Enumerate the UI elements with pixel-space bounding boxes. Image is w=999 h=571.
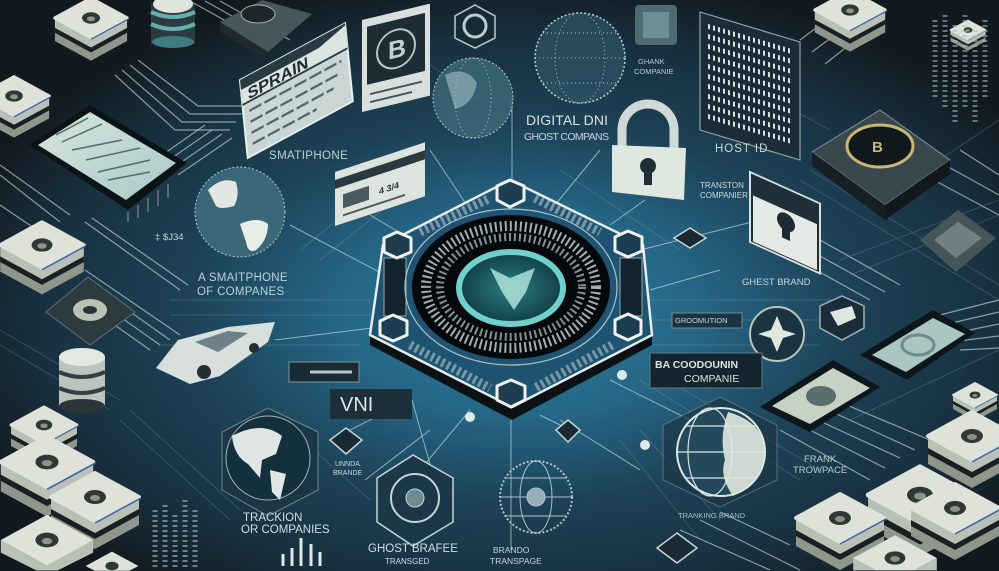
panel: credit card: 4 3/4 [379, 180, 400, 196]
main hexagon emblem [370, 180, 652, 420]
icon: dotted globe, top centre [535, 13, 625, 103]
icon: earth hexagon, lower left [222, 408, 318, 516]
icon: chip, top right [812, 110, 950, 220]
icon: database cylinder [59, 348, 105, 413]
label: vni [330, 389, 412, 419]
text: a smartphone of companies: OF COMPANES [197, 286, 284, 298]
icon: grey chip, right [920, 210, 996, 272]
icon: padlock [612, 104, 686, 200]
frame panels [384, 198, 642, 388]
label: bank companies: BA COODOUNIN [655, 359, 738, 371]
icon: top hexagon [455, 5, 495, 48]
decoration: binary column right [935, 15, 985, 125]
text: tracking of companies: OR COMPANIES [241, 524, 330, 536]
icon: emblem hexagon [820, 296, 864, 340]
panel: credit card [335, 142, 425, 226]
label: frank tropace: FRANK [804, 454, 837, 465]
heading: ghost companies small: GHANK [638, 57, 665, 66]
icons: blocks lower left [1, 407, 141, 571]
panel: bitcoin card: B [388, 34, 406, 66]
panel: Spain card [240, 23, 353, 158]
icon: wire globe, left [195, 167, 285, 257]
icon: wire sphere, bottom centre [500, 461, 572, 533]
icon: dotted globe, left centre [433, 58, 513, 138]
icon: top right blocks [815, 0, 986, 52]
central lens [405, 209, 617, 365]
icon: stacked cylinder, top [151, 0, 195, 48]
text: brand transpare: BRANDO [493, 545, 530, 555]
small text: UNNDA [335, 461, 360, 468]
icon: tablet centre right [760, 360, 880, 432]
label: lower right caption: TRANKING BRAND [678, 511, 746, 520]
icon: tablet right [860, 310, 975, 380]
icon: wire globe, lower right [663, 397, 777, 507]
subheading: ghost companies: GHOST COMPANS [524, 131, 609, 143]
label: smartphone: SMATIPHONE [269, 150, 348, 162]
hexagon node icons [380, 180, 642, 407]
text: brand transpare: TRANSPAGE [490, 556, 542, 566]
text: ghost trafee: TRANSGED [385, 557, 430, 566]
icon: small chip [635, 5, 677, 45]
label: host id: HOST ID [715, 143, 768, 155]
network connector lines [275, 100, 760, 550]
label: frank tropace: TROWPACE [793, 465, 847, 476]
icon: chip, left [46, 277, 135, 345]
icon: stacked server blocks, top left [0, 0, 129, 138]
icon: hidden card right [750, 172, 820, 274]
icon: chip, top right: B [872, 139, 883, 156]
label: transaction company: TRANSTON [700, 181, 744, 190]
panel: Spain card: SPRAIN [247, 52, 309, 103]
label: transaction company: COMPANIER [700, 191, 748, 200]
heading: digital dni: DIGITAL DNI [526, 112, 608, 128]
label: small figures: ‡ $J34 [155, 232, 184, 243]
small hexagons bottom [330, 420, 697, 563]
small tag [289, 362, 359, 382]
icon: hexagon target, bottom centre [377, 455, 453, 546]
icons: blocks lower right [796, 383, 999, 570]
label: small caption: GROOMUTION [675, 316, 728, 325]
small text: BRANDE [333, 470, 363, 477]
decoration: bars lower left [155, 500, 195, 570]
icon: chip, top [220, 0, 312, 60]
text: tracking of companies: TRACKION [243, 512, 302, 524]
label: bank companies [650, 353, 762, 388]
icon: emblem circle [750, 307, 804, 361]
panel: bitcoin card [362, 4, 430, 112]
icon: server block left [0, 222, 86, 294]
label: small caption [672, 313, 742, 328]
icon: smartphone, top left [30, 105, 187, 222]
text: a smartphone of companies: A SMAITPHONE [198, 272, 288, 284]
text: ghost trafee: GHOST BRAFEE [368, 543, 458, 555]
label: vni: VNI [340, 394, 373, 416]
sound bars [283, 538, 320, 566]
panel: data code sheet [700, 12, 800, 160]
label: bank companies: COMPANIE [684, 373, 739, 385]
icon: small hexagon [674, 228, 706, 248]
heading: ghost companies small: COMPANIE [634, 67, 673, 76]
label: ghost brand: GHEST BRAND [742, 277, 811, 288]
icon: car [156, 322, 275, 384]
